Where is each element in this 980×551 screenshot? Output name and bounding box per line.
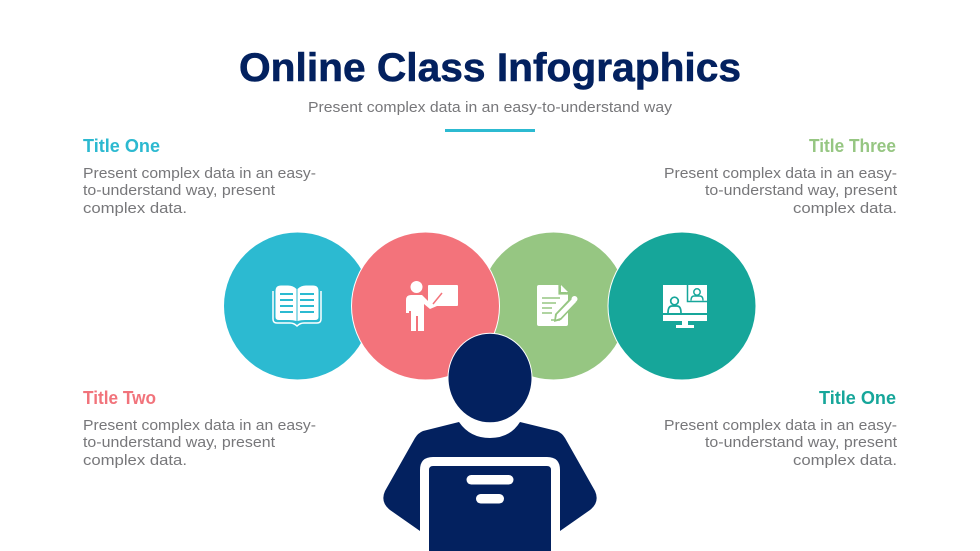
text block: Title Three top right: Title Three (809, 136, 896, 156)
text block: Title Three top right (664, 136, 897, 217)
text block: Title One top left: to-understand way, present (83, 183, 275, 199)
text block: Title Two bottom left: Present complex data in an easy- (83, 418, 316, 434)
subtitle: Present complex data in an easy-to-understand way (308, 100, 673, 116)
circle: green (480, 232, 627, 380)
icon: teacher at board (406, 281, 458, 331)
text block: Title One top left: Title One (83, 136, 160, 156)
laptop logo bars (466, 475, 514, 484)
circle: blue (224, 232, 371, 380)
laptop screen (429, 466, 551, 551)
text block: Title One top left (83, 136, 316, 217)
circle: pink (352, 232, 500, 380)
text block: Title One bottom right: to-understand way, present (705, 435, 897, 451)
text block: Title Two bottom left: Title Two (83, 388, 156, 408)
title: Online Class Infographics (239, 46, 741, 90)
icon: document with pencil (537, 285, 578, 326)
icon: open book (273, 286, 321, 326)
text block: Title One top left: Present complex data in an easy- (83, 166, 316, 182)
text block: Title Three top right: to-understand way, present (705, 183, 897, 199)
icon: video call monitor (663, 285, 707, 328)
accent bar (445, 129, 535, 132)
circle: teal (608, 232, 756, 380)
text block: Title Two bottom left: to-understand way, present (83, 435, 275, 451)
text block: Title Two bottom left (83, 388, 316, 469)
head (448, 333, 532, 423)
text block: Title One bottom right: Present complex data in an easy- (664, 418, 897, 434)
text block: Title One bottom right (664, 388, 897, 469)
laptop outline (420, 457, 560, 551)
text block: Title Three top right: complex data. (793, 201, 897, 217)
text block: Title One bottom right: Title One (819, 388, 896, 408)
text block: Title One bottom right: complex data. (793, 453, 897, 469)
text block: Title Two bottom left: complex data. (83, 453, 187, 469)
text block: Title Three top right: Present complex data in an easy- (664, 166, 897, 182)
torso and arms (383, 422, 597, 551)
text block: Title One top left: complex data. (83, 201, 187, 217)
student figure (383, 333, 597, 551)
